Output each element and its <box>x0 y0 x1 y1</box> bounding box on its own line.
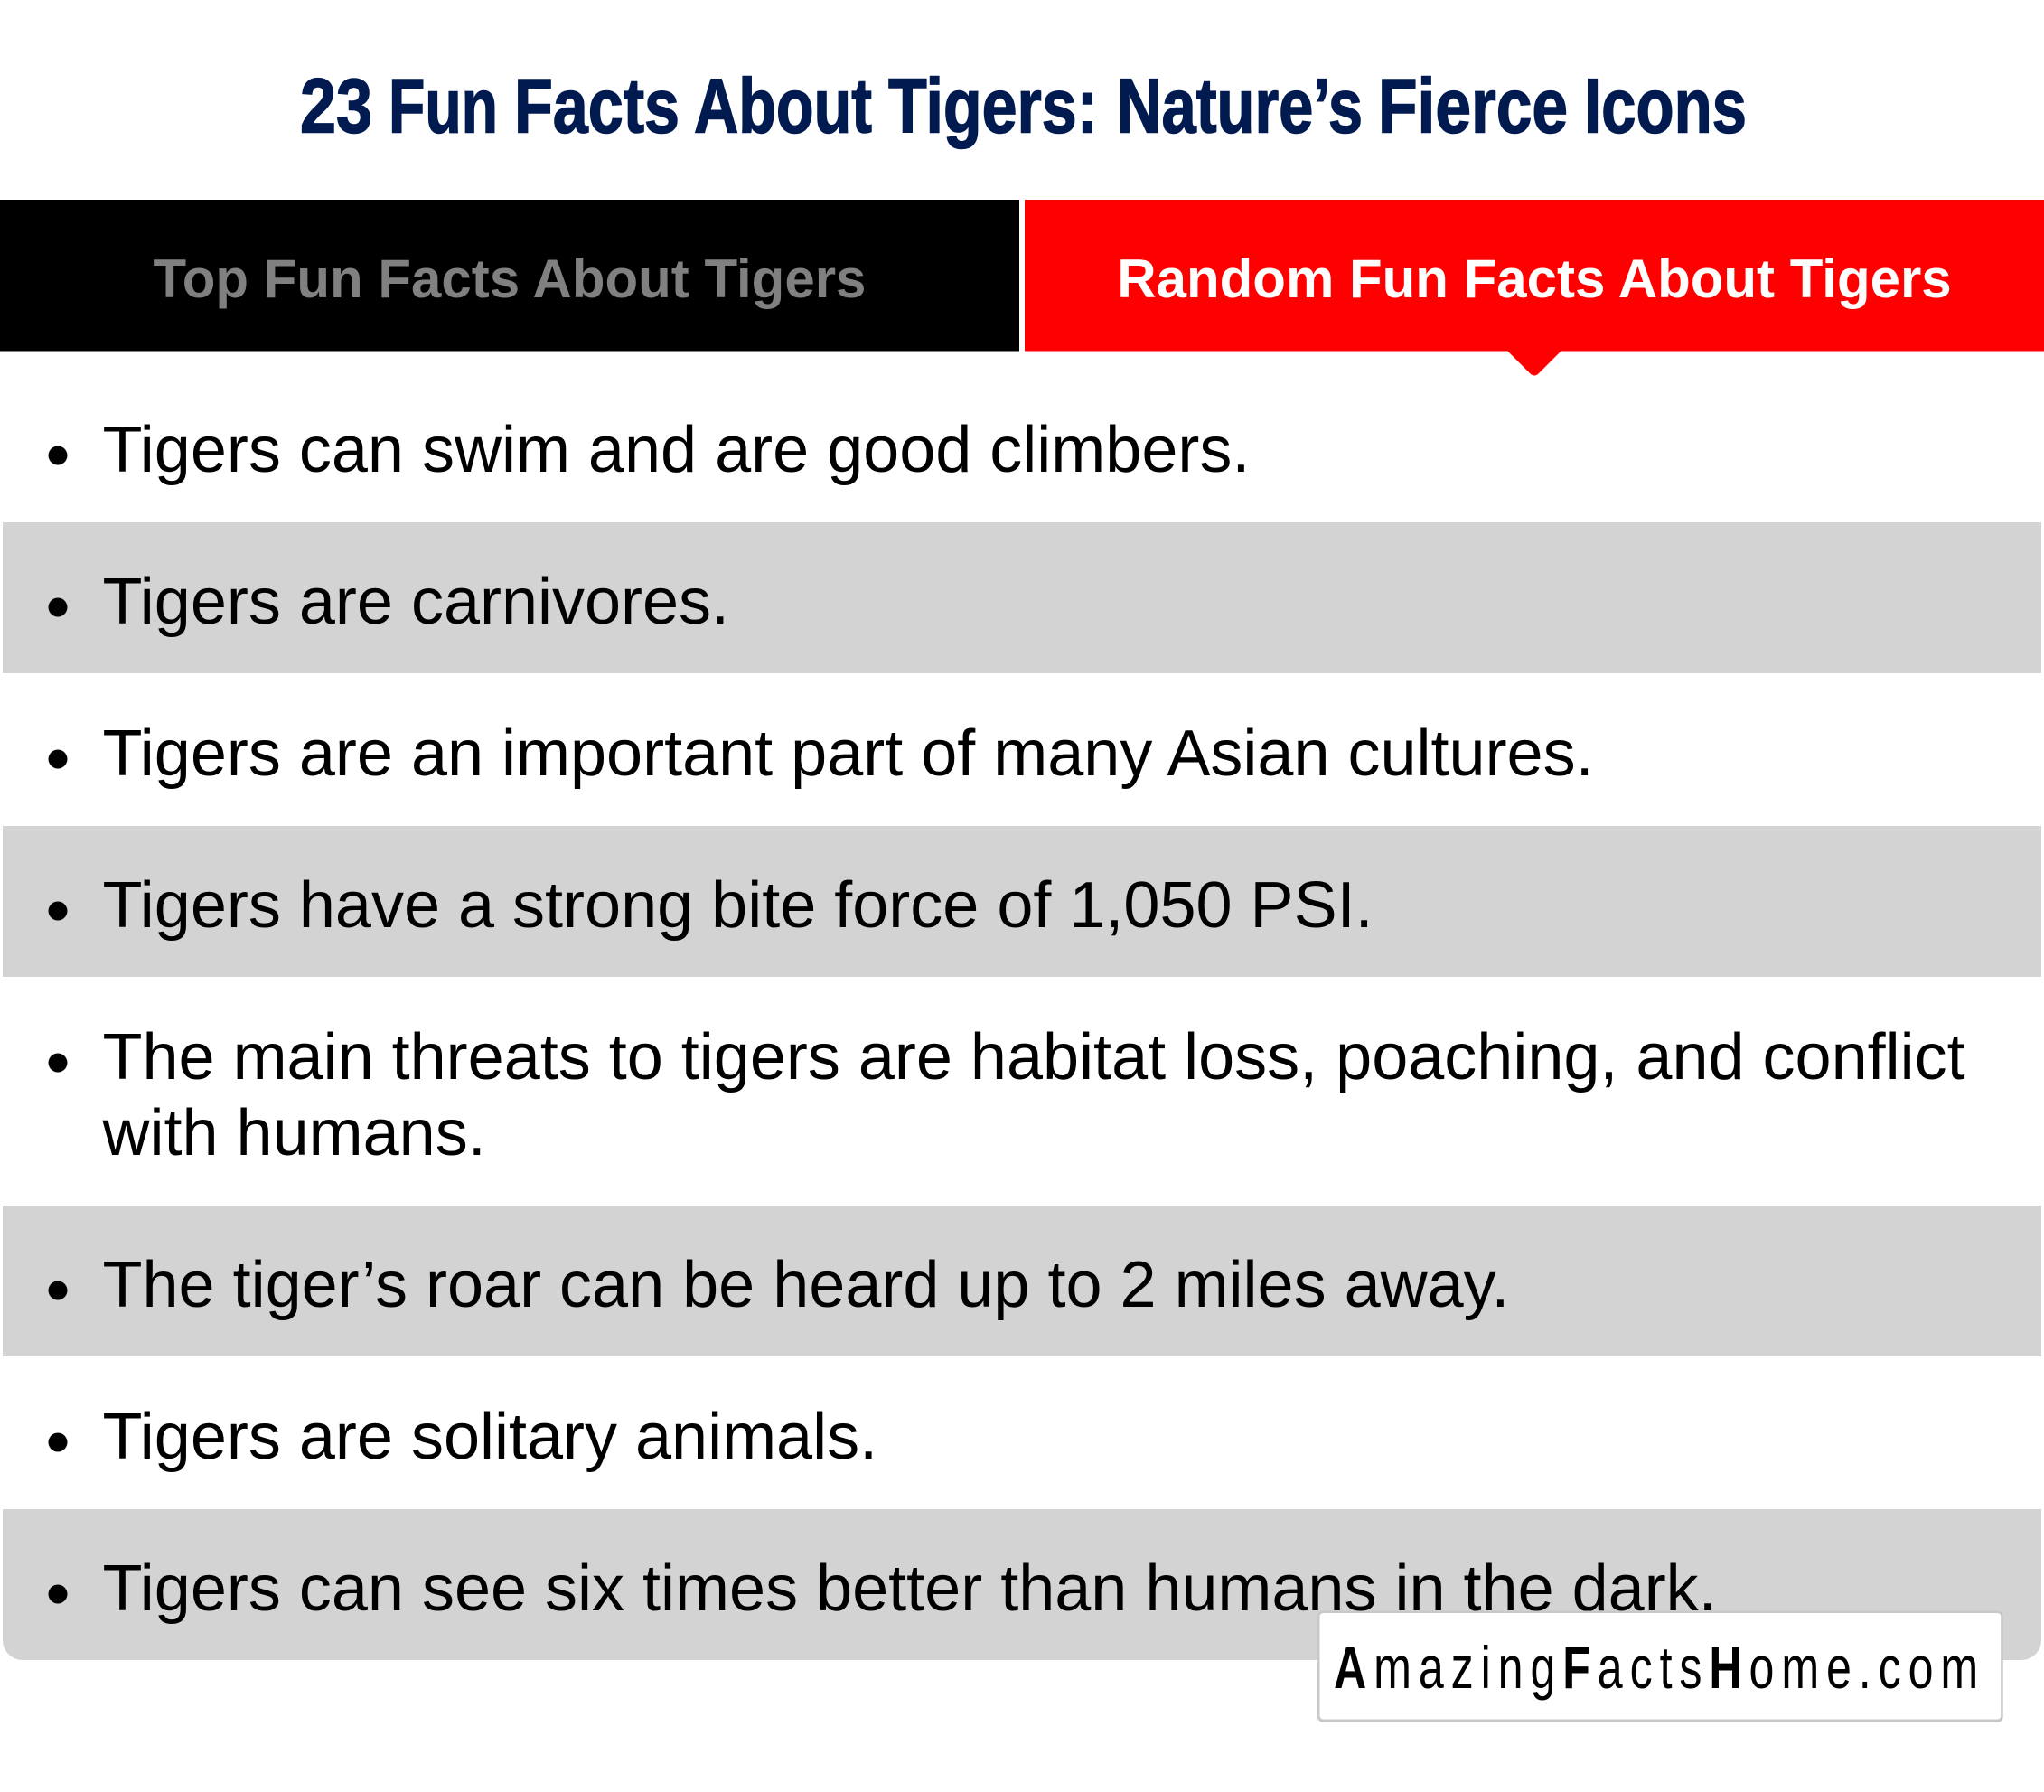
fact row 7: Tigers are solitary animals. <box>103 1401 877 1473</box>
fact row 2 <box>3 522 2041 673</box>
tab: top fun facts: Top Fun Facts About Tigers <box>154 249 866 309</box>
title: 23 <box>300 63 372 150</box>
title: Fierce <box>1378 63 1568 150</box>
tab: random fun facts (active) <box>1025 200 2044 376</box>
fact row 5: The main threats to tigers are habitat loss, poaching, and conflict <box>103 1021 1965 1093</box>
fact row 3: Tigers are an important part of many Asian cultures. <box>103 718 1594 790</box>
title: Icons <box>1584 63 1747 150</box>
title: Nature’s <box>1117 63 1363 150</box>
fact list panel <box>3 414 2041 1660</box>
fact row 8 <box>3 1509 2041 1660</box>
watermark badge: AmazingFactsHome.com: AmazingFactsHome.com <box>1334 1635 1985 1702</box>
title: About <box>694 63 872 150</box>
fact row 6 <box>3 1206 2041 1356</box>
tab: random fun facts (active): Random Fun Facts About Tigers <box>1117 249 1952 309</box>
title <box>300 63 1747 150</box>
fact row 4: Tigers have a strong bite force of 1,050 PSI. <box>103 869 1374 942</box>
fact row 2: Tigers are carnivores. <box>103 566 729 638</box>
fact row 5 <box>49 1021 1965 1169</box>
fact row 4 <box>3 826 2041 977</box>
fact row 5: with humans. <box>101 1097 486 1169</box>
fact row 6: The tiger’s roar can be heard up to 2 miles away. <box>103 1249 1509 1321</box>
tab: top fun facts <box>0 200 1019 351</box>
fact row 8: Tigers can see six times better than humans in the dark. <box>103 1553 1717 1625</box>
watermark badge: AmazingFactsHome.com <box>1317 1610 2003 1722</box>
fact row 1: Tigers can swim and are good climbers. <box>103 414 1250 486</box>
title: Tigers: <box>888 63 1098 150</box>
title: Facts <box>514 63 680 150</box>
title: Fun <box>389 63 498 150</box>
